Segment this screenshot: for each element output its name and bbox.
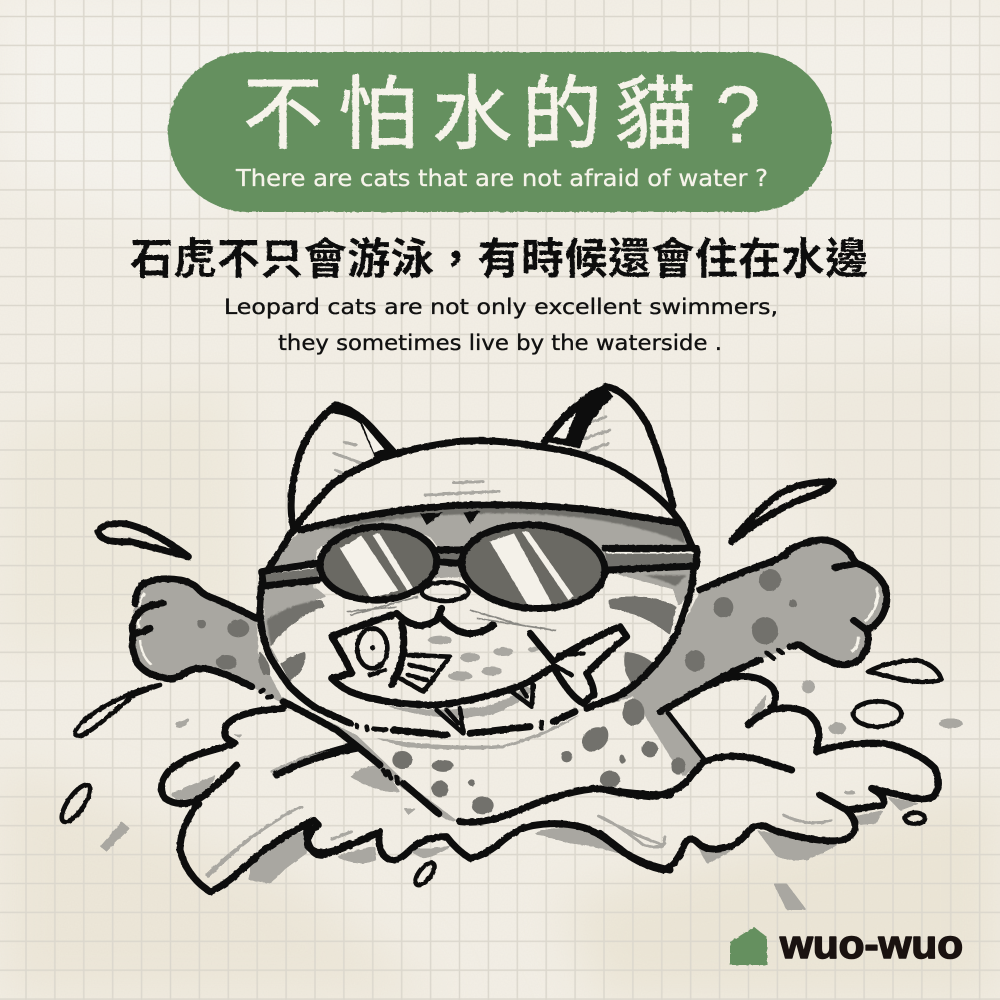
head outline — [260, 441, 695, 735]
fish held in mouth — [332, 615, 627, 705]
water shadows — [600, 680, 963, 910]
icon: green house — [730, 927, 767, 965]
cat body and bottom water — [170, 698, 670, 888]
forehead stripes — [420, 511, 480, 525]
brand wordmark: wuo-wuo — [779, 923, 963, 967]
illustration: swimming leopard cat — [57, 387, 963, 910]
water droplets right — [732, 482, 942, 824]
green pill — [168, 52, 832, 212]
water droplets left — [57, 524, 188, 826]
nose and mouth — [347, 582, 557, 634]
english description: they sometimes live by the waterside . — [278, 331, 722, 355]
chinese title: 不 — [243, 70, 323, 159]
right water splash — [600, 482, 963, 910]
left arm — [132, 579, 288, 707]
goggles — [318, 520, 608, 613]
head markings — [260, 417, 695, 718]
chinese title: 水 — [432, 70, 512, 159]
goggle straps — [262, 548, 697, 586]
shadows — [100, 718, 350, 883]
english subtitle: There are cats that are not afraid of water ? — [235, 166, 768, 192]
chinese title: 貓 — [615, 70, 695, 159]
english description — [224, 295, 778, 355]
body shading — [170, 698, 665, 883]
fangs — [437, 685, 533, 733]
right arm — [598, 540, 887, 787]
left water splash — [57, 524, 350, 892]
cat head — [260, 387, 697, 735]
chinese title: ? — [716, 70, 760, 159]
chinese title: 的 — [522, 70, 602, 159]
chinese subheading: 石虎不只會游泳，有時候還會住在水邊 — [130, 236, 868, 284]
ears — [291, 387, 673, 527]
logo: wuo-wuo — [730, 923, 963, 967]
chinese title: 怕 — [338, 70, 418, 159]
chinese title — [243, 70, 760, 159]
small droplet — [412, 860, 438, 888]
body spots — [392, 699, 658, 814]
english description: Leopard cats are not only excellent swimmers, — [224, 295, 778, 319]
title banner — [168, 52, 832, 212]
